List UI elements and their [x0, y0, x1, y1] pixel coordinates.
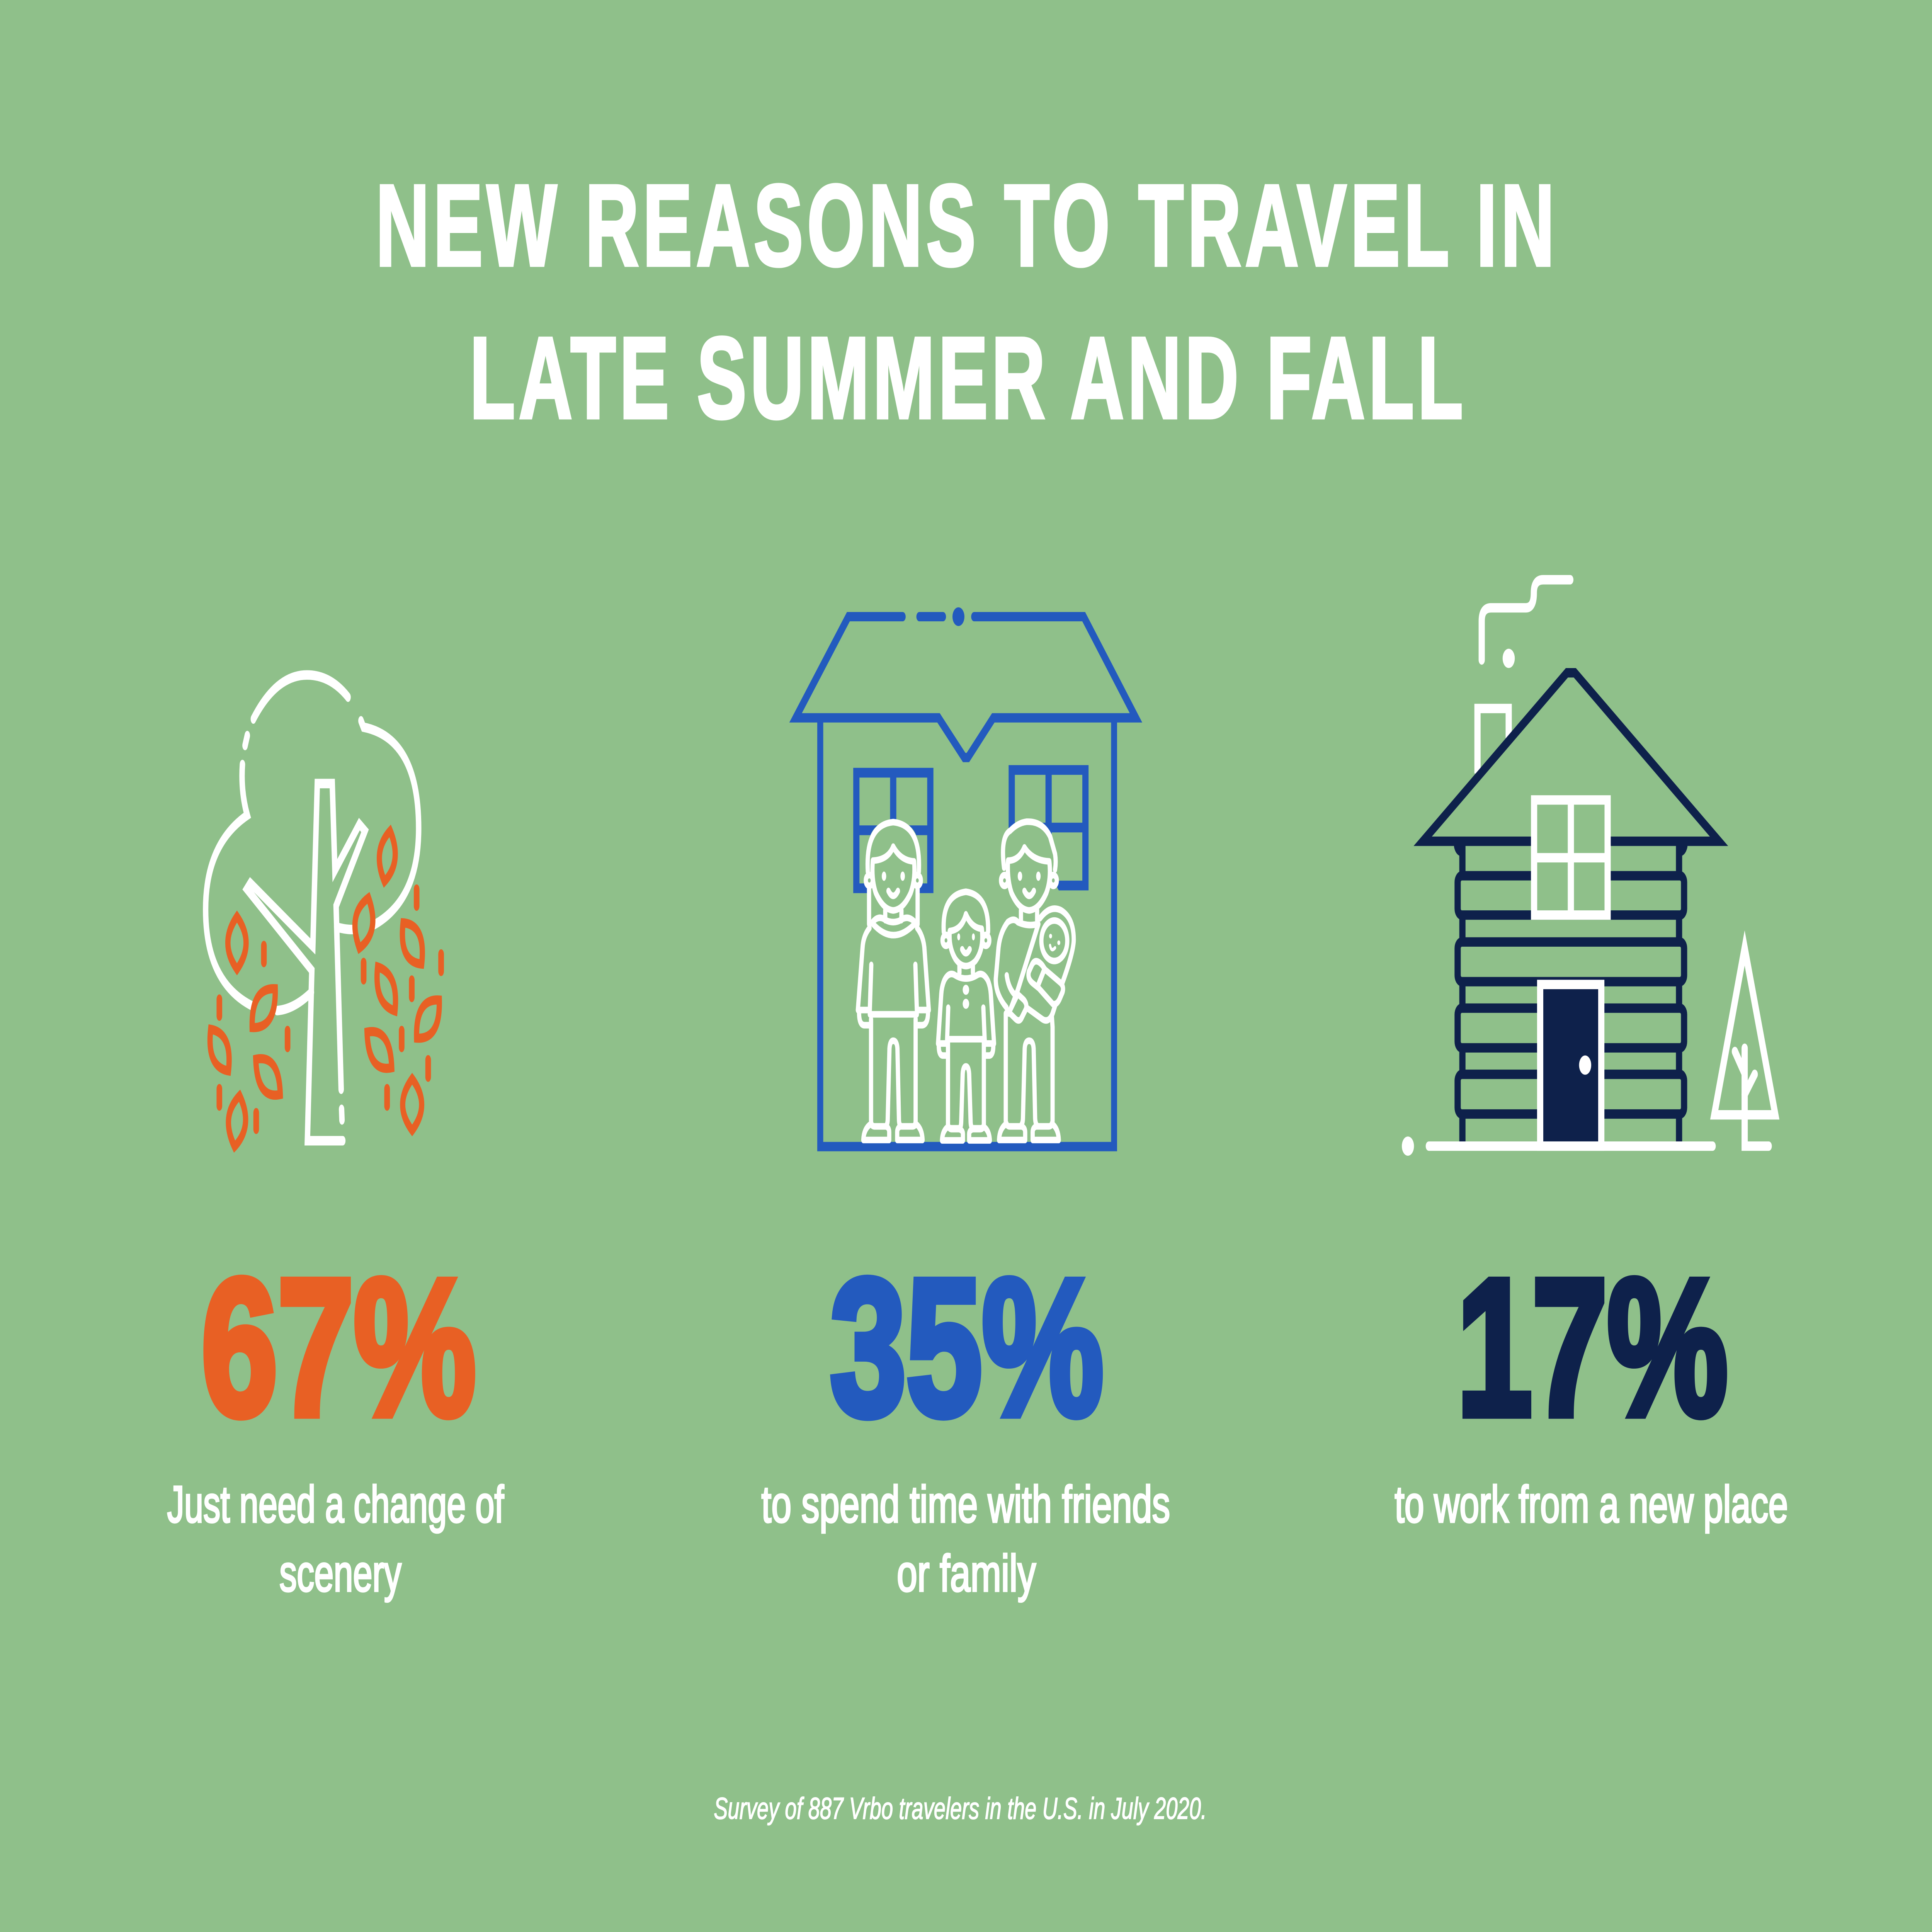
stat: 17 percent: 17%: [1457, 1239, 1728, 1456]
figure: man holding baby: [996, 822, 1075, 1140]
caption: new place: to work from a new place: [1395, 1475, 1788, 1533]
stat: 67 percent: 67%: [201, 1239, 476, 1456]
figure: child: [938, 892, 994, 1140]
caption: scenery: scenery: [279, 1544, 401, 1602]
caption: scenery: Just need a change of: [167, 1475, 504, 1533]
cabin roof: [1423, 673, 1719, 841]
cabin window: [1534, 800, 1608, 915]
title: [376, 161, 1554, 443]
ground line: [1402, 1136, 1713, 1156]
cabin walls and logs: [1457, 846, 1684, 1143]
stat: 35 percent: 35%: [830, 1239, 1104, 1456]
house windows: [856, 770, 1085, 888]
title: NEW REASONS TO TRAVEL IN: [376, 161, 1554, 290]
chimney smoke: [1482, 580, 1570, 668]
tree canopy outline: [206, 675, 418, 1010]
falling leaves: [210, 831, 439, 1147]
caption: friends or family: or family: [897, 1544, 1036, 1602]
cabin door: [1540, 985, 1601, 1146]
title: LATE SUMMER AND FALL: [470, 313, 1463, 443]
icon: family in front of house: [796, 607, 1136, 1146]
figure: woman: [858, 821, 929, 1140]
leaf dashes: [219, 889, 441, 1129]
icon: log cabin with tree: [1402, 580, 1776, 1156]
caption: friends or family: to spend time with friends: [761, 1475, 1170, 1533]
caption: scenery: [167, 1475, 504, 1602]
small pine tree: [1714, 948, 1776, 1146]
house outline: [796, 607, 1136, 1146]
tree trunk and branches: [247, 784, 365, 1141]
icon: autumn tree with falling leaves: [206, 675, 441, 1147]
chimney: [1478, 709, 1509, 774]
survey footnote: Survey of 887 Vrbo travelers in the U.S. in July 2020.: [714, 1792, 1207, 1826]
caption: friends or family: [761, 1475, 1170, 1602]
